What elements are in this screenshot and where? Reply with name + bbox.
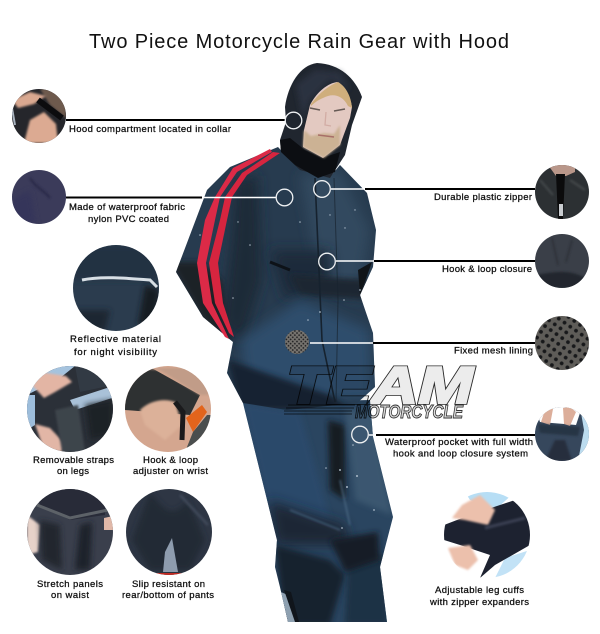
pants [243,400,393,625]
caption with photo: removable straps [27,366,114,477]
callout: waterproof fabric [66,189,293,225]
hood [280,63,362,178]
mesh patch on jacket [285,330,309,354]
photo: waterproof pocket [535,407,589,461]
callout: waterproof pocket: hook and loop closure system [393,448,528,460]
caption with photo: leg cuffs: with zipper expanders [429,597,529,608]
caption with photo: slip resistant: Slip resistant on [132,579,205,590]
face [303,82,352,158]
caption with photo: stretch panels: Stretch panels [37,579,103,590]
title: Two Piece Motorcycle Rain Gear with Hood [89,31,509,53]
caption with photo: stretch panels: on waist [51,590,89,601]
jacket [170,147,376,529]
caption with photo: wrist adjuster: Hook & loop [143,455,198,466]
callout: plastic zipper [314,181,535,203]
caption with photo: leg cuffs: Adjustable leg cuffs [435,585,524,596]
red stripes on sleeve [197,149,280,339]
callout: hood compartment: Hood compartment located in collar [69,124,231,135]
photo: mesh lining [535,316,589,370]
callout: waterproof fabric: Made of waterproof fabric [69,202,185,213]
photo: plastic zipper [535,165,589,219]
caption with photo: stretch panels [27,489,113,601]
caption with photo: reflective material: Reflective material [70,334,161,345]
caption with photo: slip resistant: rear/bottom of pants [122,590,214,601]
caption with photo: reflective material [70,245,161,358]
caption with photo: removable straps: Removable straps [33,455,114,466]
callout: hook and loop closure [319,253,535,275]
photo: hook and loop closure [535,234,589,288]
caption with photo: reflective material: for night visibility [74,347,157,358]
brand logo: TEAM [287,357,475,415]
callout: waterproof fabric: nylon PVC coated [88,214,169,225]
caption with photo: leg cuffs [429,492,530,608]
model wearing rain gear [170,63,393,625]
photo: navy fabric [12,170,66,224]
callout: plastic zipper: Durable plastic zipper [434,192,532,203]
photo: hood compartment [12,89,66,143]
callout: waterproof pocket: Waterproof pocket with full width [385,437,533,448]
callout: hook and loop closure: Hook & loop closure [442,264,532,275]
brand logo [284,357,475,422]
brand logo: MOTORCYCLE [355,402,464,422]
callout: fixed mesh lining: Fixed mesh lining [454,346,533,356]
caption with photo: slip resistant [122,489,214,601]
caption with photo: wrist adjuster [125,366,212,477]
callout: hood compartment [66,112,302,135]
callout: waterproof pocket [352,426,535,460]
brand logo: TEAM [287,357,475,415]
droplets [199,209,375,529]
caption with photo: removable straps: on legs [57,466,89,477]
caption with photo: wrist adjuster: adjuster on wrist [133,466,208,477]
